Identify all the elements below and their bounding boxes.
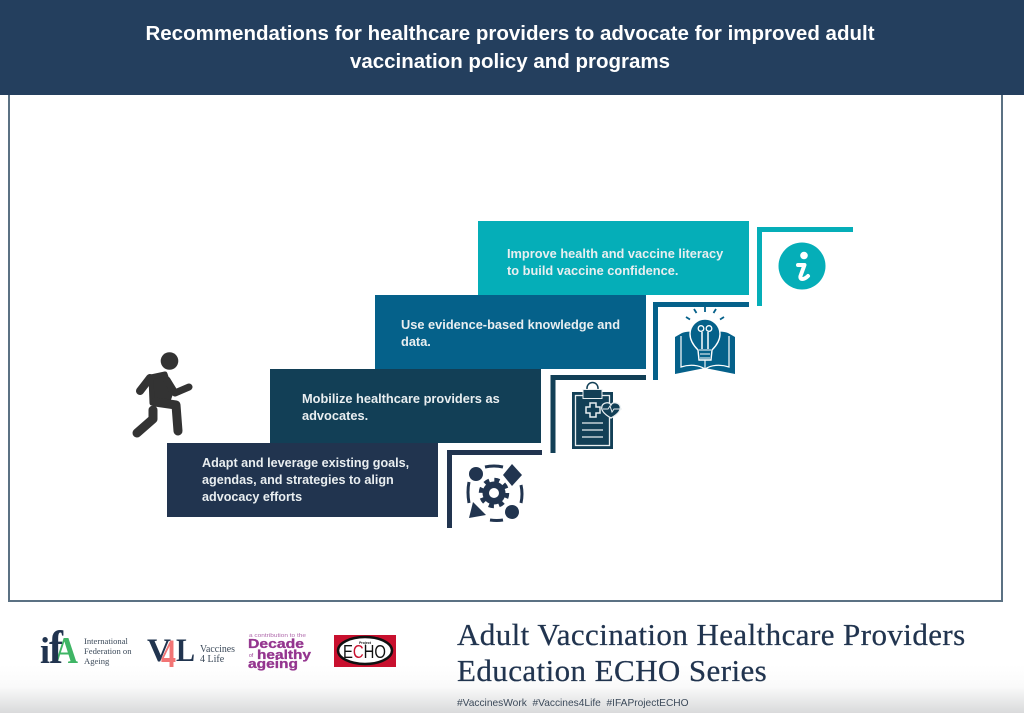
step 3: evidence: Use evidence-based knowledge and [401, 317, 620, 332]
title: Recommendations for healthcare providers to advocate for improved adult [145, 22, 875, 45]
step 1: adapt: agendas, and strategies to align [202, 473, 394, 487]
step 1: adapt: advocacy efforts [202, 490, 302, 504]
logo: IFA: f [49, 622, 64, 674]
series title [457, 617, 966, 688]
logo: Decade of healthy ageing: a contribution to the [249, 633, 306, 639]
step 1: adapt [167, 443, 438, 517]
step 2: mobilize: advocates. [302, 408, 368, 422]
logo: IFA: A [54, 630, 78, 672]
icon: gear and shapes [468, 464, 522, 520]
step 1: adapt: Adapt and leverage existing goals, [202, 456, 409, 470]
icon: book and light bulb [675, 307, 735, 374]
logo: Vaccines 4 Life: V [147, 633, 171, 669]
bracket 3 [656, 304, 749, 380]
logo: IFA: Federation on [84, 646, 132, 656]
step 2: mobilize: Mobilize healthcare providers as [302, 391, 500, 406]
logo: Decade of healthy ageing: of [249, 653, 254, 659]
footer gradient background [0, 665, 1024, 713]
logo: Vaccines 4 Life: L [176, 633, 195, 669]
logo: IFA [40, 622, 132, 674]
icon: running person [137, 352, 189, 433]
bracket 4 [760, 230, 853, 306]
step 4: health literacy: to build vaccine confidence. [507, 262, 678, 278]
logo: Decade of healthy ageing: Decade [248, 637, 304, 651]
panel: main frame [8, 90, 1003, 602]
logo: IFA: i [40, 631, 50, 672]
bracket 2 [553, 378, 646, 453]
series title: Adult Vaccination Healthcare Providers [457, 617, 966, 652]
logo: Decade of healthy ageing: healthy [257, 648, 311, 662]
logo: IFA: International [84, 636, 129, 646]
header band with title [0, 0, 1024, 95]
logo: IFA: Ageing [84, 656, 110, 666]
logo: Project ECHO: Project [359, 641, 372, 645]
step 2: mobilize [270, 369, 541, 443]
logo: Project ECHO [334, 635, 396, 667]
step 3: evidence [375, 295, 646, 369]
series title: Education ECHO Series [457, 653, 767, 688]
step 3: evidence: data. [401, 334, 431, 348]
logo: Vaccines 4 Life: Vaccines [200, 644, 235, 655]
icon: clipboard with heart [572, 382, 622, 449]
logo: Decade of healthy ageing [248, 633, 311, 671]
title: vaccination policy and programs [350, 50, 670, 73]
icon: information [778, 242, 826, 290]
logo: Decade of healthy ageing: ageing [248, 657, 298, 671]
bracket 1 [450, 452, 542, 528]
step 4: health literacy: Improve health and vaccine literacy [507, 246, 723, 261]
step 4: health literacy [478, 221, 749, 295]
logo: Project ECHO: ECHO [343, 642, 386, 662]
logo: Vaccines 4 Life: 4 [161, 631, 176, 676]
logo: Vaccines 4 Life: 4 Life [200, 654, 225, 665]
hashtags: #VaccinesWork #Vaccines4Life #IFAProjectECHO [457, 698, 689, 709]
title [145, 22, 875, 73]
logo: Vaccines 4 Life [147, 631, 235, 676]
